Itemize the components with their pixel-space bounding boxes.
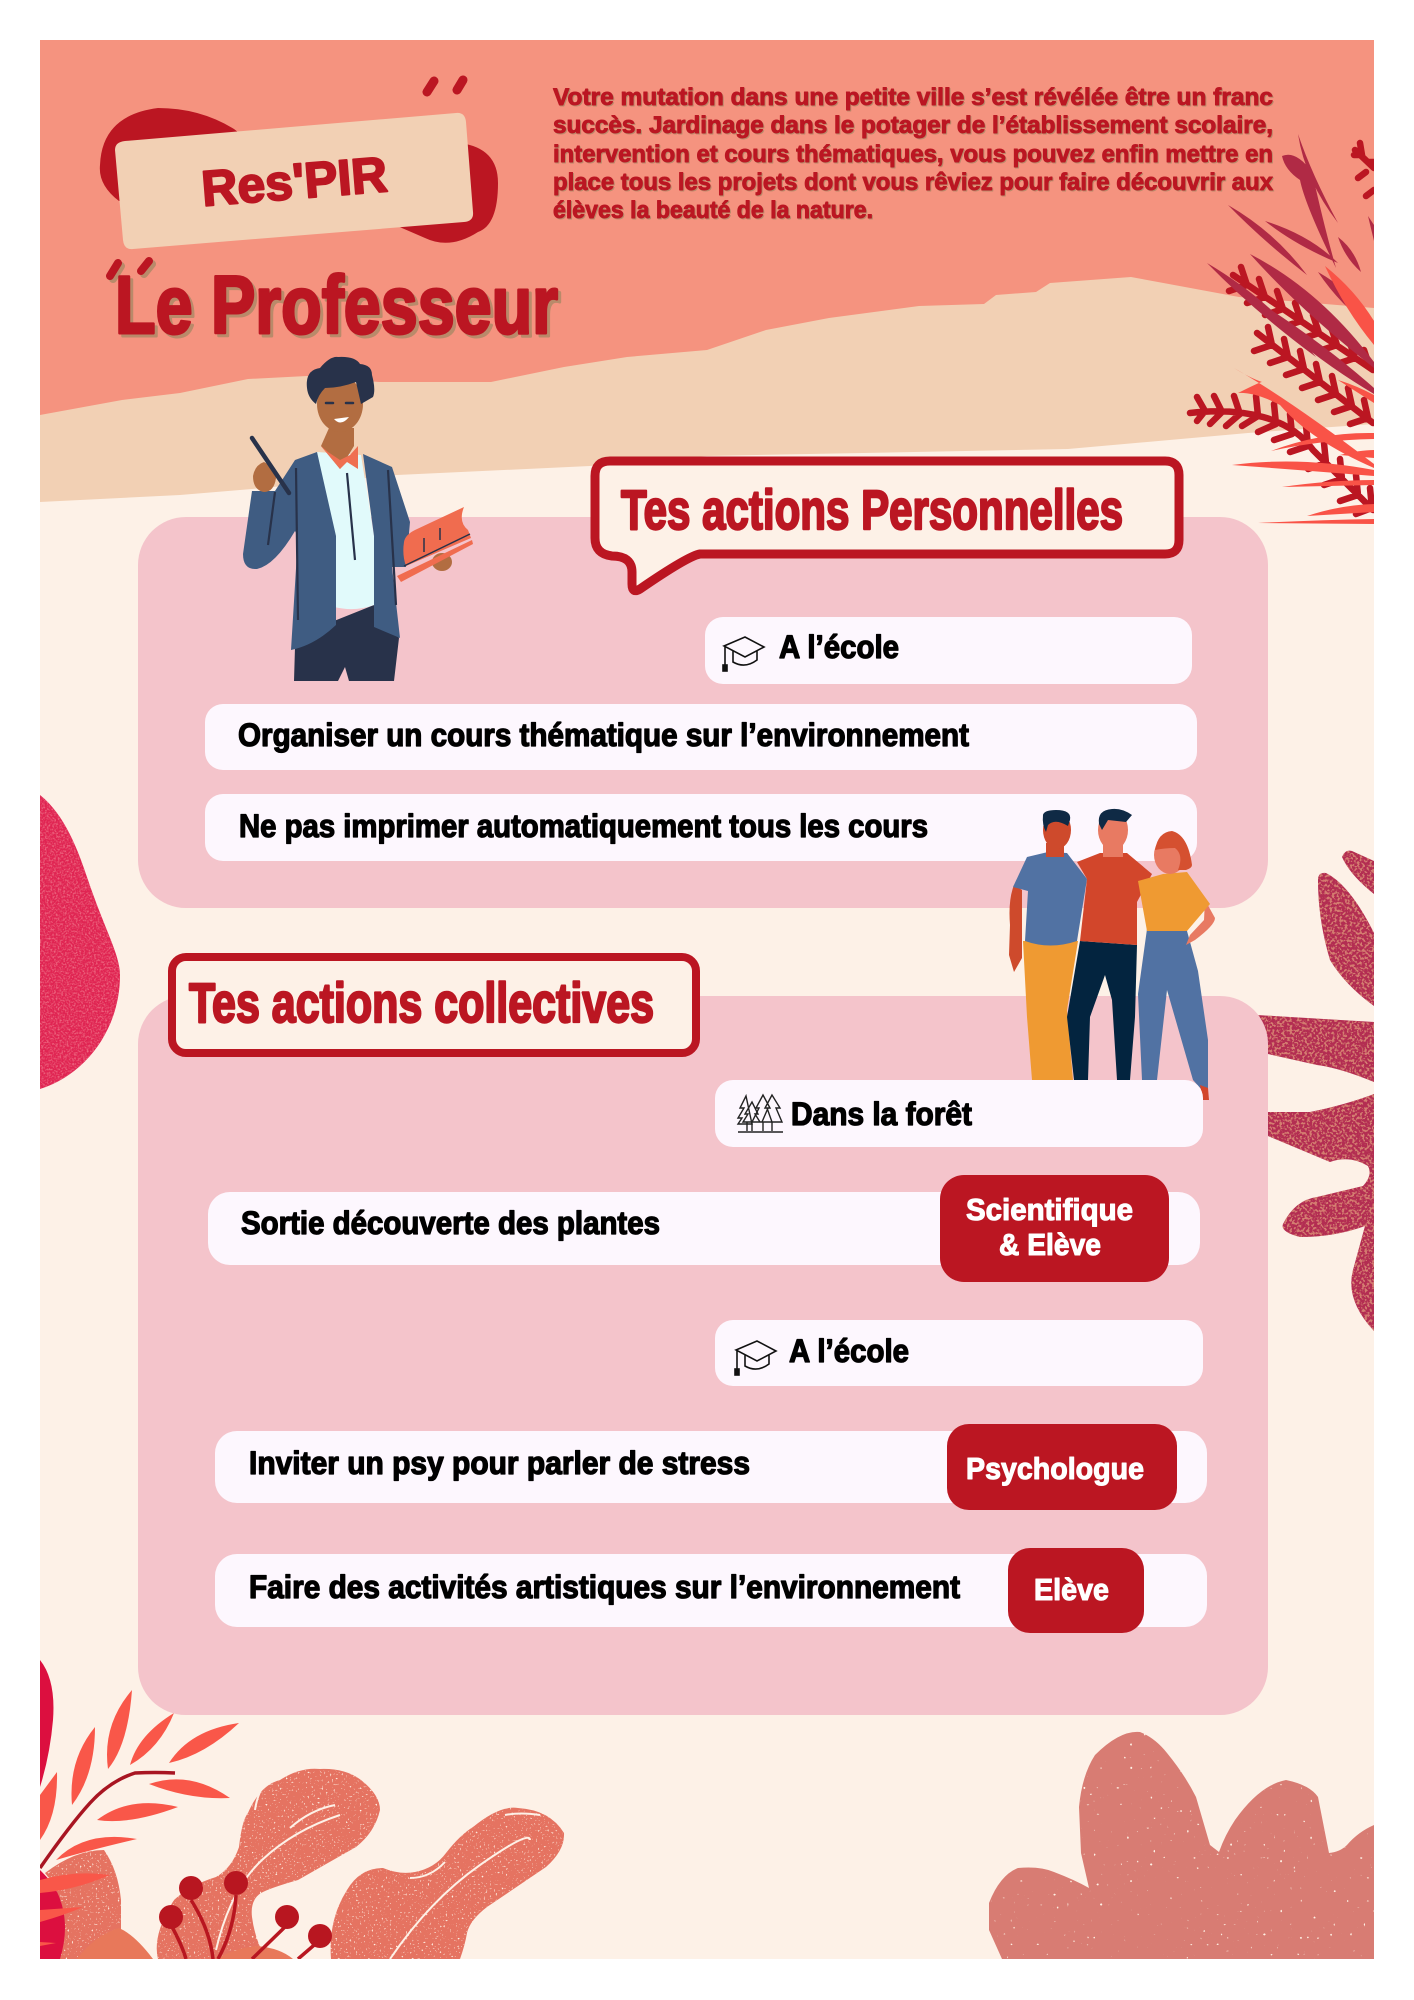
badge: Res'PIR: Res'PIR: [199, 146, 389, 217]
salmon leaves: [45, 1769, 564, 1959]
icon: trees: [738, 1095, 783, 1132]
badge: blobs and decorative marks: [100, 80, 498, 243]
plant: bottom left foliage: [40, 1660, 564, 1959]
heading: Tes actions Personnelles speech bubble: Tes actions Personnelles: [621, 478, 1123, 541]
coral leaves: [40, 1690, 239, 1946]
illustration: three people: [1009, 809, 1215, 1100]
row: activités artistiques: Faire des activités artistiques sur l’environnement: [249, 1569, 960, 1605]
berries: [159, 1871, 332, 1959]
badge: Res'PIR: [115, 113, 473, 249]
woman: [1138, 831, 1215, 1100]
intro paragraph: place tous les projets dont vous rêviez pour faire découvrir aux: [553, 169, 1274, 196]
pill: A l'école header: A l’école: [779, 629, 899, 665]
row: activités artistiques: [215, 1548, 1207, 1633]
tag: Psychologue: Psychologue: [966, 1451, 1144, 1486]
tag: Scientifique & Elève: Scientifique: [966, 1192, 1133, 1227]
intro paragraph: intervention et cours thématiques, vous pouvez enfin mettre en: [553, 141, 1273, 168]
crimson petal: [40, 1660, 65, 1959]
title: Le Professeur: Le Professeur: [115, 260, 558, 351]
intro paragraph: [553, 84, 1274, 224]
intro paragraph: Votre mutation dans une petite ville s’est révélée être un franc: [553, 84, 1273, 111]
heading: Tes actions collectives: [172, 957, 696, 1053]
row: inviter un psy: [215, 1424, 1207, 1510]
plant: left red blob: [40, 795, 120, 1089]
tag: Scientifique & Elève: & Elève: [999, 1227, 1101, 1262]
intro paragraph: élèves la beauté de la nature.: [553, 197, 873, 224]
man one: [1009, 810, 1087, 1080]
pill: A l'école header: [705, 617, 1192, 684]
tag: Psychologue: [947, 1424, 1177, 1510]
plant: right speckled leaf: [1258, 850, 1374, 1331]
icon: graduation cap: [723, 637, 764, 671]
orange mounds: [77, 1928, 293, 1959]
pill: Dans la forêt header: [715, 1080, 1203, 1147]
intro paragraph: succès. Jardinage dans le potager de l’établissement scolaire,: [553, 112, 1273, 139]
row: organiser un cours: Organiser un cours thématique sur l’environnement: [238, 717, 969, 753]
torn paper band beige: [40, 277, 1374, 502]
heading: Tes actions collectives: Tes actions collectives: [189, 971, 654, 1034]
icon: graduation cap: [735, 1341, 776, 1375]
row: organiser un cours: [205, 704, 1197, 770]
background cream: [40, 424, 1374, 1959]
plant: bottom right flower shape: [989, 1732, 1374, 1959]
man two: [1067, 809, 1152, 1080]
pill: A l'école header two: A l’école: [789, 1333, 909, 1369]
heading: Tes actions Personnelles speech bubble: [595, 461, 1179, 591]
panel: collective actions background: [138, 996, 1268, 1715]
pill: Dans la forêt header: Dans la forêt: [791, 1096, 972, 1132]
tag: Elève: Elève: [1034, 1572, 1109, 1607]
panel: personal actions background: [138, 517, 1268, 908]
tag: Scientifique & Elève: [940, 1175, 1169, 1282]
row: ne pas imprimer: Ne pas imprimer automatiquement tous les cours: [239, 808, 928, 844]
row: ne pas imprimer: [205, 794, 1197, 861]
plant: top right foliage: [1190, 134, 1376, 524]
stem: [40, 1772, 175, 1868]
torn paper band salmon: [40, 40, 1374, 415]
row: sortie découverte: [208, 1175, 1200, 1282]
pill: A l'école header two: [715, 1320, 1203, 1386]
illustration: teacher: [243, 357, 473, 681]
tag: Elève: [1008, 1548, 1144, 1633]
row: sortie découverte: Sortie découverte des plantes: [241, 1205, 660, 1241]
row: inviter un psy: Inviter un psy pour parler de stress: [249, 1445, 750, 1481]
leaf veins: [216, 1780, 540, 1959]
